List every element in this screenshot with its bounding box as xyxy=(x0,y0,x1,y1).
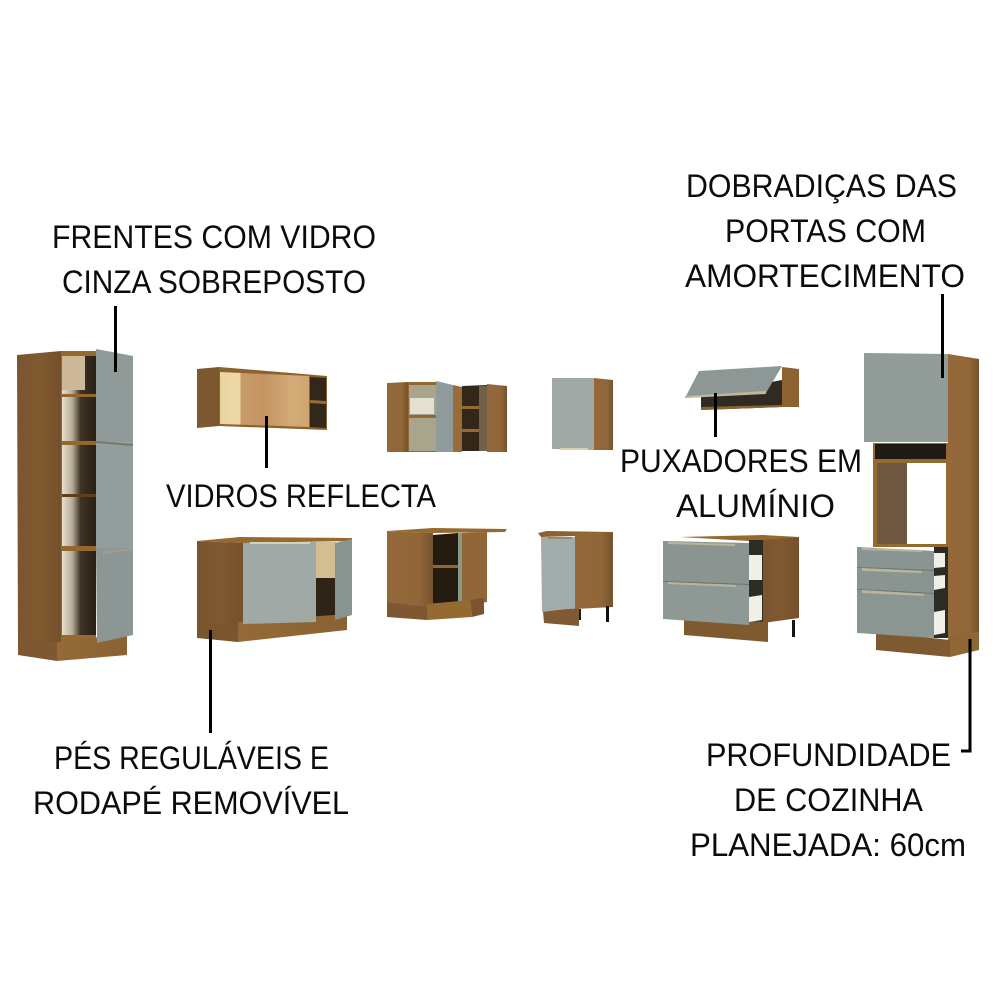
cabinet: tall oven tower with drawers xyxy=(857,353,979,657)
cabinet: narrow base unit with legs xyxy=(538,531,613,626)
label: adjustable feet: PÉS REGULÁVEIS E xyxy=(54,740,329,776)
cabinet: base unit with two doors xyxy=(197,537,352,642)
label: door hinges xyxy=(685,168,965,294)
leader line: depth xyxy=(961,639,970,751)
label: door hinges: DOBRADIÇAS DAS xyxy=(686,168,957,204)
label: glass fronts: CINZA SOBREPOSTO xyxy=(62,264,366,300)
label: glass fronts xyxy=(52,219,376,300)
cabinet: wall unit with reflecta glass xyxy=(197,367,327,430)
label: adjustable feet xyxy=(33,740,349,821)
label: aluminium handles: ALUMÍNIO xyxy=(676,488,835,524)
label: kitchen depth: PLANEJADA: 60cm xyxy=(690,827,966,863)
label: aluminium handles: PUXADORES EM xyxy=(620,443,862,479)
label: kitchen depth xyxy=(690,737,966,863)
leader line: adjustable feet xyxy=(209,630,212,733)
label: adjustable feet: RODAPÉ REMOVÍVEL xyxy=(33,785,349,821)
label: kitchen depth: DE COZINHA xyxy=(734,782,924,818)
cabinet: corner base unit xyxy=(387,528,507,620)
leader line: aluminium handles xyxy=(714,393,717,437)
label: glass fronts: FRENTES COM VIDRO xyxy=(52,219,376,255)
cabinet: base unit with two drawers xyxy=(663,535,799,642)
label: aluminium handles xyxy=(620,443,862,524)
leader line: reflecta glass xyxy=(265,416,268,468)
leader line: door hinges xyxy=(941,294,944,378)
cabinet: corner wall unit xyxy=(387,381,507,452)
label: door hinges: AMORTECIMENTO xyxy=(685,258,965,294)
cabinet: flip-up wall unit xyxy=(685,366,799,410)
leader line: glass fronts xyxy=(114,306,117,372)
label: door hinges: PORTAS COM xyxy=(725,213,926,249)
cabinet: small wall unit xyxy=(552,378,613,450)
cabinet: tall pantry with glass doors xyxy=(17,349,133,661)
label: kitchen depth: PROFUNDIDADE xyxy=(706,737,951,773)
label: reflecta glass: VIDROS REFLECTA xyxy=(166,478,437,514)
